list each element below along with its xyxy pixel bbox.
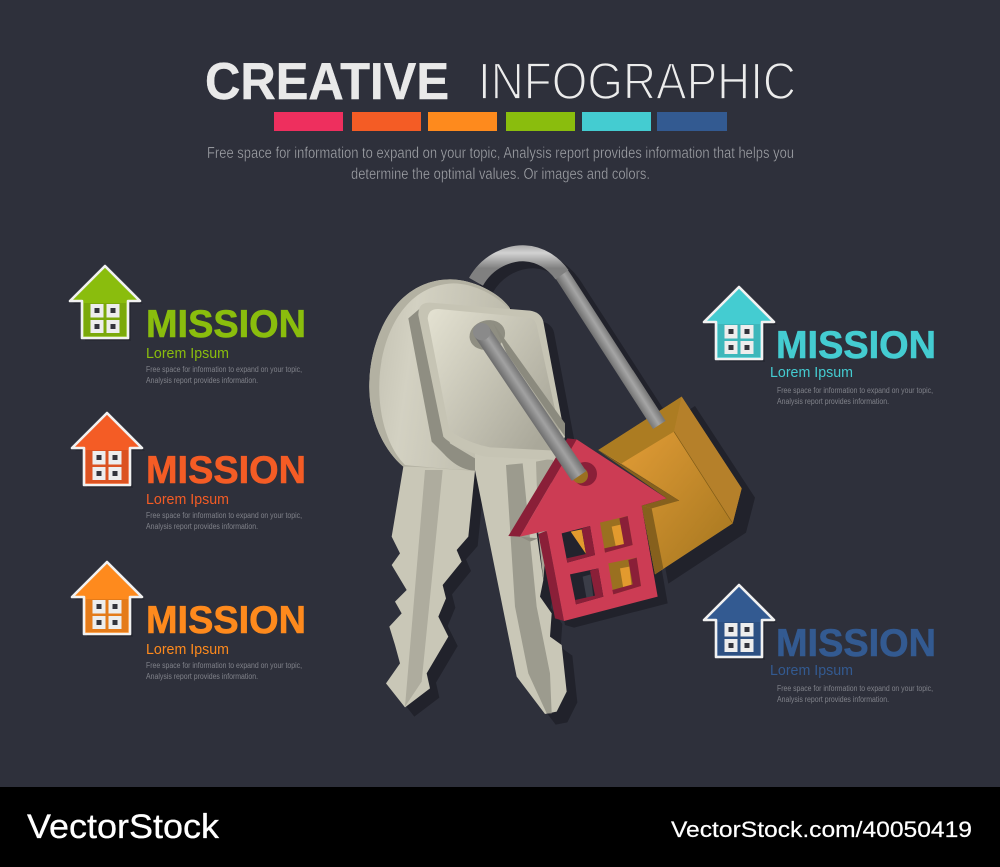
subtitle: determine the optimal values. Or images and colors. [351,166,650,183]
key bunch illustration [369,253,755,725]
icon: blue house [704,585,777,660]
body text: Free space for information to expand on your topic, [146,511,302,520]
body text [146,661,302,681]
body text: Analysis report provides information. [777,397,889,406]
brown house tag back [597,397,742,574]
footer url: VectorStock.com/40050419 [671,817,972,842]
body text: Free space for information to expand on your topic, [146,661,302,670]
icon: red-orange house [72,413,145,488]
title [205,53,796,111]
body text: Analysis report provides information. [146,376,258,385]
front key [408,303,567,714]
colour swatch bar [274,112,727,131]
ring upper [476,253,659,425]
sub heading: Lorem Ipsum [146,642,229,658]
sub heading: Lorem Ipsum [770,663,853,679]
footer brand: VectorStock [27,808,220,846]
footer band [0,787,1000,867]
icon: teal house [704,287,777,362]
body text: Free space for information to expand on your topic, [777,386,933,395]
subtitle: Free space for information to expand on your topic, Analysis report provides information that helps you [207,145,794,162]
title: INFOGRAPHIC [478,53,796,111]
icon: orange house [72,562,145,637]
shadows [379,261,755,725]
mission item: orange [72,562,306,681]
mission item: green [70,266,306,385]
sub heading: Lorem Ipsum [770,365,853,381]
heading: MISSION [146,599,306,642]
red house tag [508,438,667,621]
body text: Analysis report provides information. [146,522,258,531]
ring through key [473,323,579,476]
mission item: blue [704,585,936,704]
title: CREATIVE [205,53,449,111]
body text: Analysis report provides information. [146,672,258,681]
heading: MISSION [146,449,306,492]
body text [146,365,302,385]
sub heading: Lorem Ipsum [146,492,229,508]
house tag windows [562,516,641,604]
body text [777,386,933,406]
mission item: teal [704,287,936,406]
sub heading: Lorem Ipsum [146,346,229,362]
subtitle [207,145,794,183]
body text: Free space for information to expand on your topic, [777,684,933,693]
heading: MISSION [146,303,306,346]
icon: green house [70,266,143,341]
heading: MISSION [776,622,936,665]
body text [146,511,302,531]
body text [777,684,933,704]
heading: MISSION [776,324,936,367]
ring bar over tag flap [627,374,659,425]
mission item: red-orange [72,413,306,531]
key hole [466,316,565,437]
body text: Free space for information to expand on your topic, [146,365,302,374]
body text: Analysis report provides information. [777,695,889,704]
back key [369,279,510,707]
